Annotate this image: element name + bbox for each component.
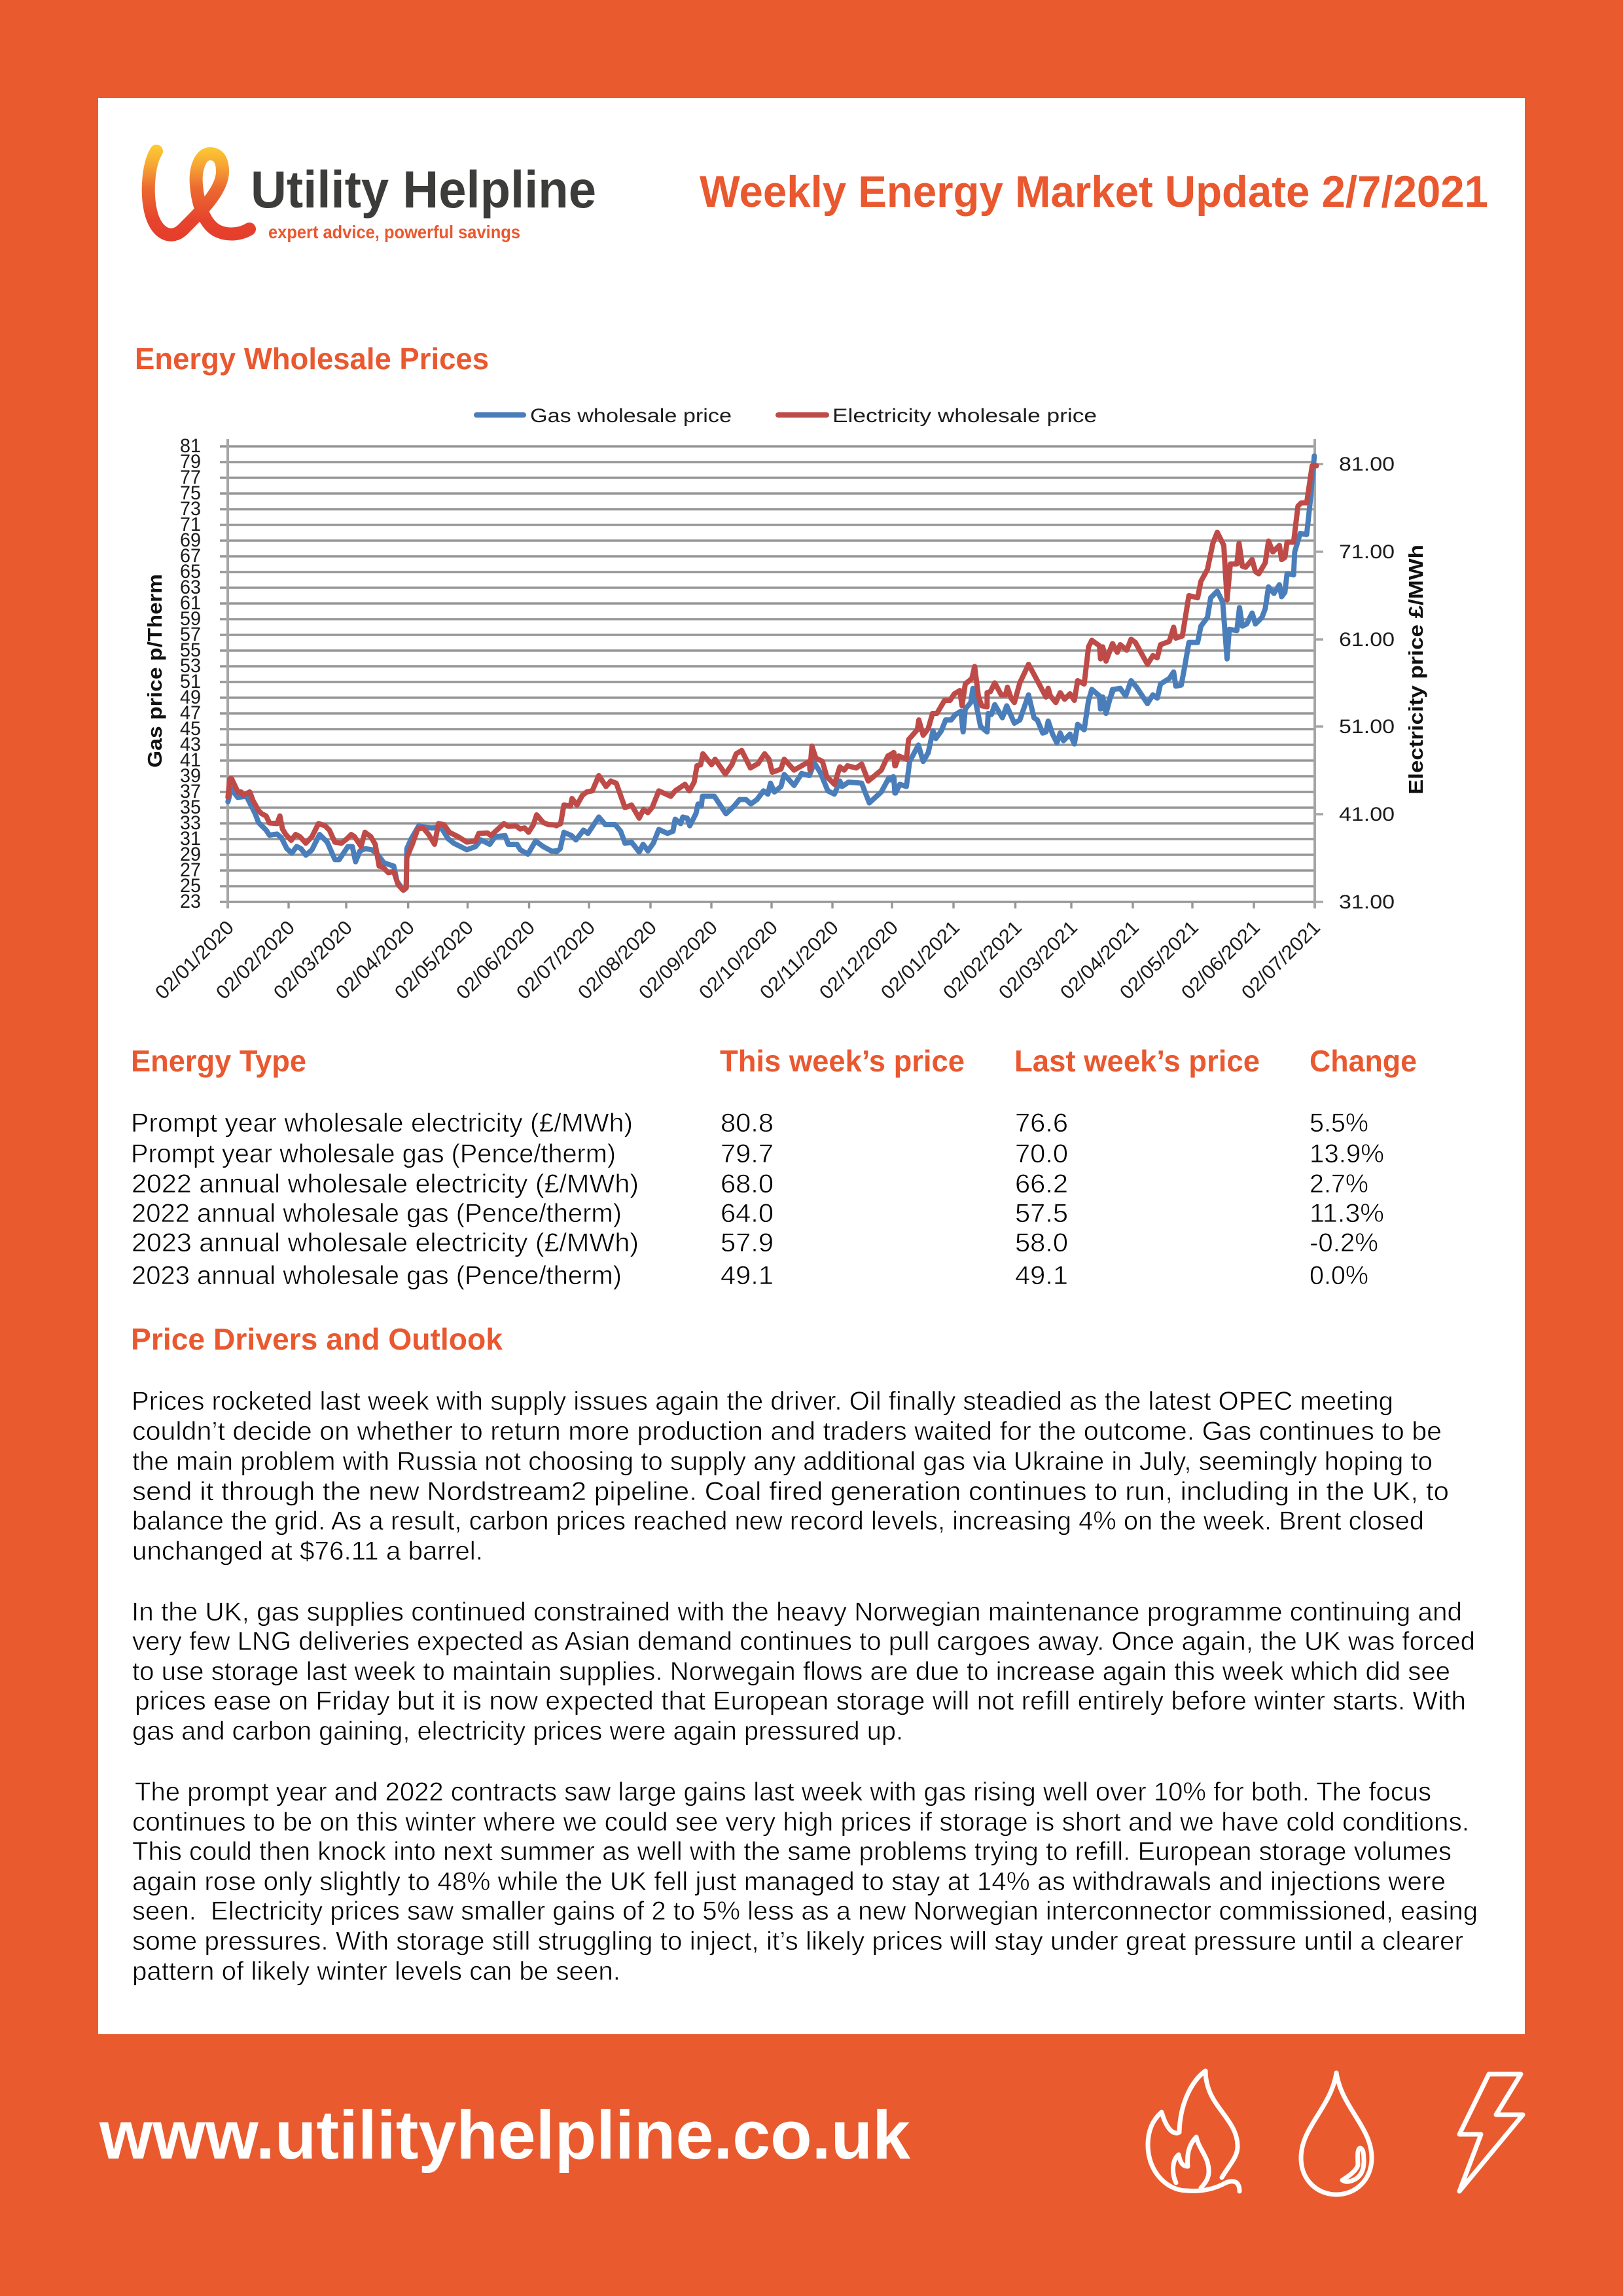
row: 2023 electricity bbox=[132, 1229, 1378, 1257]
row: prompt year electricity: 5.5% bbox=[1310, 1109, 1368, 1138]
x axis date labels: 02/08/2020 bbox=[574, 917, 661, 1004]
table header row: Energy Type bbox=[131, 1044, 306, 1078]
paragraph: contracts outlook: again rose only slightly to 48% while the UK fell just managed to stay at 14% as withdrawals and injections were bbox=[132, 1867, 1446, 1896]
right axis labels: electricity price: 71.00 bbox=[1339, 541, 1395, 563]
paragraph: market overview: couldn’t decide on whether to return more production and traders waited for the outcome. Gas continues to be bbox=[132, 1417, 1442, 1446]
left axis labels: gas price: 27 bbox=[180, 859, 201, 881]
table header row: Last week’s price bbox=[1014, 1044, 1260, 1078]
right axis title: Electricity price £/MWh bbox=[1404, 545, 1427, 795]
row: 2022 electricity: 66.2 bbox=[1015, 1170, 1068, 1198]
row: prompt year electricity: 80.8 bbox=[721, 1109, 774, 1138]
paragraph: contracts outlook: pattern of likely winter levels can be seen. bbox=[132, 1957, 620, 1986]
paragraph: contracts outlook: This could then knock into next summer as well with the same problems trying to refill. European storage volumes bbox=[132, 1837, 1452, 1866]
series: gas wholesale price (blue) bbox=[228, 456, 1314, 890]
left axis labels: gas price: 81 bbox=[180, 435, 201, 457]
footer website url: www.utilityhelpline.co.uk bbox=[99, 2097, 911, 2174]
left axis labels: gas price: 61 bbox=[180, 592, 201, 614]
left axis labels: gas price: 29 bbox=[180, 844, 201, 865]
left axis labels: gas price: 57 bbox=[180, 624, 201, 645]
left axis labels: gas price: 47 bbox=[180, 702, 201, 724]
x axis date labels: 02/07/2021 bbox=[1238, 917, 1325, 1004]
row: 2022 gas: 57.5 bbox=[1015, 1199, 1068, 1228]
row: 2022 electricity bbox=[132, 1170, 1368, 1198]
left axis labels: gas price: 23 bbox=[180, 891, 201, 912]
paragraph: contracts outlook: The prompt year and 2022 contracts saw large gains last week with gas rising well over 10% for both. The focus bbox=[135, 1778, 1431, 1806]
row: prompt year gas bbox=[131, 1139, 1384, 1168]
x axis date labels: 02/02/2021 bbox=[939, 917, 1026, 1004]
left axis labels: gas price: 65 bbox=[180, 561, 201, 583]
left axis labels: gas price: 49 bbox=[180, 687, 201, 708]
panel: white content area bbox=[98, 98, 1525, 2034]
left axis labels: gas price: 75 bbox=[180, 482, 201, 504]
left axis labels: gas price: 39 bbox=[180, 765, 201, 787]
row: 2023 electricity: 2023 annual wholesale electricity (£/MWh) bbox=[132, 1229, 639, 1257]
row: 2022 electricity: 2022 annual wholesale electricity (£/MWh) bbox=[132, 1170, 639, 1198]
table header row: This week’s price bbox=[720, 1044, 965, 1078]
left axis labels: gas price: 35 bbox=[180, 797, 201, 818]
title: Weekly Energy Market Update 2/7/2021 bbox=[700, 167, 1488, 217]
row: 2023 gas: 49.1 bbox=[721, 1261, 774, 1290]
paragraph: contracts outlook bbox=[132, 1778, 1478, 1986]
row: prompt year gas: 70.0 bbox=[1015, 1139, 1068, 1168]
x axis date labels: 02/07/2020 bbox=[512, 917, 599, 1004]
x axis date labels: 02/03/2020 bbox=[270, 917, 357, 1004]
right axis labels: electricity price: 51.00 bbox=[1339, 716, 1395, 738]
x axis date labels: 02/10/2020 bbox=[695, 917, 782, 1004]
chart legend bbox=[476, 405, 1097, 427]
right axis labels: electricity price: 61.00 bbox=[1339, 629, 1395, 651]
row: 2022 gas bbox=[132, 1199, 1384, 1228]
line chart: gas and electricity wholesale prices bbox=[143, 405, 1427, 1004]
row: prompt year electricity: Prompt year wholesale electricity (£/MWh) bbox=[131, 1109, 633, 1138]
icon: lightning bolt bbox=[1459, 2074, 1523, 2191]
row: 2022 gas: 64.0 bbox=[721, 1199, 774, 1228]
x axis date labels: 02/03/2021 bbox=[995, 917, 1082, 1004]
paragraph: market overview: Prices rocketed last week with supply issues again the driver. Oil finally steadied as the latest OPEC meeting bbox=[132, 1387, 1393, 1416]
row: prompt year gas: 13.9% bbox=[1310, 1139, 1384, 1168]
row: 2023 gas: 2023 annual wholesale gas (Pence/therm) bbox=[132, 1261, 622, 1290]
x axis date labels: 02/06/2020 bbox=[452, 917, 539, 1004]
paragraph: UK gas supplies: to use storage last week to maintain supplies. Norwegain flows are due to increase again this week which did see bbox=[132, 1657, 1450, 1686]
paragraph: market overview: send it through the new Nordstream2 pipeline. Coal fired generation continues to run, including in the UK, to bbox=[132, 1477, 1449, 1506]
paragraph: UK gas supplies: very few LNG deliveries expected as Asian demand continues to pull cargoes away. Once again, the UK was forced bbox=[132, 1627, 1475, 1656]
row: 2023 gas: 0.0% bbox=[1310, 1261, 1368, 1290]
logo: Utility Helpline bbox=[149, 151, 596, 242]
right axis labels: electricity price: 81.00 bbox=[1339, 454, 1395, 475]
row: 2023 electricity: -0.2% bbox=[1310, 1229, 1378, 1257]
left axis title: Gas price p/Therm bbox=[143, 574, 166, 768]
left axis labels: gas price: 43 bbox=[180, 734, 201, 755]
x axis date labels bbox=[151, 917, 1325, 1004]
left axis labels: gas price: 71 bbox=[180, 514, 201, 535]
paragraph: market overview: unchanged at $76.11 a barrel. bbox=[132, 1537, 483, 1566]
paragraph: market overview: the main problem with Russia not choosing to supply any additional gas via Ukraine in July, seemingly hoping to bbox=[132, 1447, 1433, 1476]
paragraph: contracts outlook: some pressures. With storage still struggling to inject, it’s likely prices will stay under great pressure until a clearer bbox=[132, 1927, 1463, 1956]
left axis labels: gas price: 69 bbox=[180, 529, 201, 551]
right axis labels: electricity price: 41.00 bbox=[1339, 804, 1395, 825]
left axis labels: gas price: 45 bbox=[180, 718, 201, 740]
chart legend: Gas wholesale price bbox=[530, 405, 732, 427]
price table bbox=[131, 1044, 1417, 1290]
row: 2023 electricity: 58.0 bbox=[1015, 1229, 1068, 1257]
series: electricity wholesale price (red) bbox=[228, 466, 1317, 890]
right axis labels: electricity price: 31.00 bbox=[1339, 891, 1395, 913]
left axis labels: gas price: 79 bbox=[180, 451, 201, 473]
x axis date labels: 02/12/2020 bbox=[815, 917, 902, 1004]
left axis labels: gas price: 63 bbox=[180, 577, 201, 598]
chart legend: Electricity wholesale price bbox=[832, 405, 1097, 427]
row: prompt year gas: 79.7 bbox=[721, 1139, 774, 1168]
left axis labels: gas price: 37 bbox=[180, 781, 201, 802]
row: 2022 gas: 2022 annual wholesale gas (Pence/therm) bbox=[132, 1199, 622, 1228]
x axis date labels: 02/04/2021 bbox=[1056, 917, 1143, 1004]
paragraph: contracts outlook: seen. Electricity prices saw smaller gains of 2 to 5% less as a new Norwegian interconnector commissioned, easing bbox=[132, 1897, 1478, 1926]
left axis labels: gas price: 51 bbox=[180, 671, 201, 692]
paragraph: market overview bbox=[132, 1387, 1449, 1566]
row: 2023 electricity: 57.9 bbox=[721, 1229, 774, 1257]
left axis labels: gas price: 41 bbox=[180, 749, 201, 771]
heading: Price Drivers and Outlook: Price Drivers and Outlook bbox=[131, 1322, 503, 1356]
logo tagline: expert advice, powerful savings bbox=[268, 222, 520, 242]
right axis labels: electricity price bbox=[1339, 454, 1395, 913]
row: 2023 gas: 49.1 bbox=[1015, 1261, 1068, 1290]
icon: water drop bbox=[1301, 2073, 1372, 2195]
left axis labels: gas price: 55 bbox=[180, 639, 201, 661]
icon: flame bbox=[1148, 2071, 1240, 2191]
row: 2022 electricity: 2.7% bbox=[1310, 1170, 1368, 1198]
paragraph: UK gas supplies: gas and carbon gaining, electricity prices were again pressured up. bbox=[132, 1717, 903, 1746]
x axis date labels: 02/04/2020 bbox=[332, 917, 419, 1004]
paragraph: contracts outlook: continues to be on this winter where we could see very high prices if storage is short and we have cold conditions. bbox=[132, 1808, 1469, 1837]
x axis date labels: 02/06/2021 bbox=[1177, 917, 1264, 1004]
paragraph: market overview: balance the grid. As a result, carbon prices reached new record levels, increasing 4% on the week. Brent closed bbox=[132, 1507, 1424, 1535]
left axis labels: gas price: 25 bbox=[180, 875, 201, 897]
table header row bbox=[131, 1044, 1417, 1078]
left axis labels: gas price: 67 bbox=[180, 545, 201, 567]
paragraph: UK gas supplies bbox=[132, 1598, 1475, 1746]
row: 2022 gas: 11.3% bbox=[1310, 1199, 1384, 1228]
x axis date labels: 02/01/2021 bbox=[877, 917, 964, 1004]
row: 2023 gas bbox=[132, 1261, 1368, 1290]
left axis labels: gas price: 33 bbox=[180, 812, 201, 834]
left axis labels: gas price: 53 bbox=[180, 655, 201, 677]
x axis date labels: 02/01/2020 bbox=[151, 917, 238, 1004]
x axis date labels: 02/05/2021 bbox=[1116, 917, 1203, 1004]
row: prompt year gas: Prompt year wholesale gas (Pence/therm) bbox=[131, 1139, 616, 1168]
logo wordmark: Utility Helpline bbox=[251, 160, 596, 219]
icon: logo swoosh bbox=[149, 151, 249, 235]
x axis date labels: 02/11/2020 bbox=[756, 917, 843, 1004]
row: prompt year electricity bbox=[131, 1109, 1368, 1138]
left axis labels: gas price: 77 bbox=[180, 467, 201, 488]
x axis date labels: 02/05/2020 bbox=[391, 917, 478, 1004]
left axis labels: gas price bbox=[180, 435, 201, 912]
paragraph: UK gas supplies: In the UK, gas supplies continued constrained with the heavy Norwegian maintenance programme continuing and bbox=[132, 1598, 1462, 1626]
left axis labels: gas price: 31 bbox=[180, 828, 201, 850]
paragraph: UK gas supplies: prices ease on Friday but it is now expected that European storage will not refill entirely before winter starts. With bbox=[135, 1687, 1466, 1715]
heading: Energy Wholesale Prices: Energy Wholesale Prices bbox=[135, 342, 489, 376]
row: prompt year electricity: 76.6 bbox=[1015, 1109, 1068, 1138]
table header row: Change bbox=[1310, 1044, 1417, 1078]
left axis labels: gas price: 73 bbox=[180, 498, 201, 520]
row: 2022 electricity: 68.0 bbox=[721, 1170, 774, 1198]
x axis date labels: 02/09/2020 bbox=[635, 917, 722, 1004]
left axis labels: gas price: 59 bbox=[180, 608, 201, 630]
x axis date labels: 02/02/2020 bbox=[212, 917, 299, 1004]
